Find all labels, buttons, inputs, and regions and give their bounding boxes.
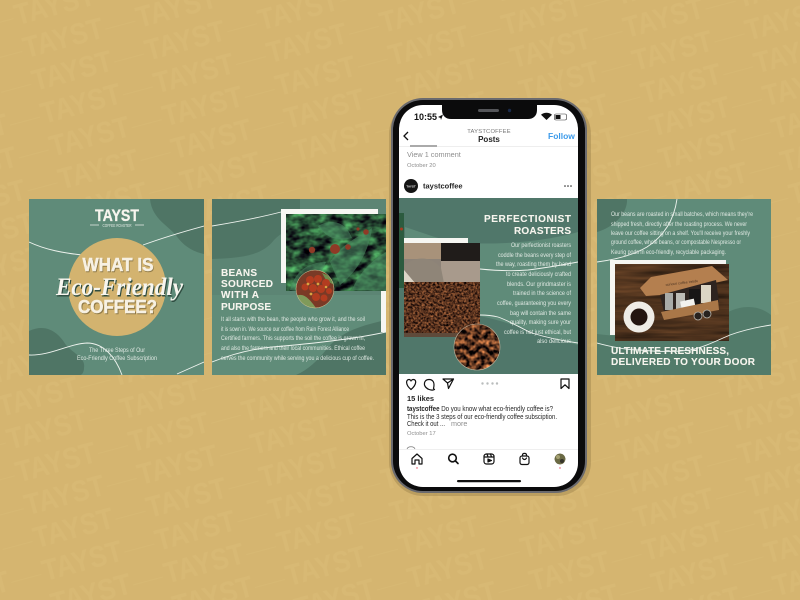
caption: more [451,419,467,428]
phone body [391,98,587,493]
action icons [407,379,569,390]
caption: 15 likes [407,394,434,403]
panel: what is eco-friendly coffee [29,199,204,375]
body text: the way, roasting them by hand [496,261,571,268]
speaker and camera [478,109,511,112]
status bar [414,112,566,122]
icon: reels [484,454,494,464]
caption: This is the 3 steps of our eco-friendly coffee subsciption. [407,412,557,421]
body text: trained in the science of [513,290,571,297]
heading: PURPOSE [221,302,271,313]
status bar: 10:55 [414,112,437,122]
scoop [418,258,444,282]
phone shadow [389,100,591,496]
box interior [660,280,719,312]
top-left dark blob [597,199,627,232]
app header: TAYSTCOFFEE [467,129,511,135]
heading: COFFEE? [79,298,158,318]
heading: SOURCED [221,279,273,290]
post header: taystcoffee [423,182,463,190]
top dark wave [212,199,300,259]
post header [404,179,572,193]
plant sliver [399,213,404,288]
body text: It all starts with the bean, the people who grow it, and the soil [221,316,365,323]
app header: Posts [478,135,500,144]
top-right dark blob [150,199,204,254]
home indicator [457,480,521,482]
heading: Eco-Friendly [55,274,184,301]
body text [496,242,572,345]
bottom curve [597,325,771,352]
photo: coffee box on wood: curious coffee inside [665,279,698,287]
body text [611,211,753,256]
subtitle [77,347,157,362]
subtitle: Eco-Friendly Coffee Subscription [77,355,157,362]
heading [612,347,755,365]
white curves [597,199,677,262]
icon: profile avatar [554,454,566,464]
previous post remnants: October 20 [407,163,436,169]
photo: roasting scoop and beans [404,243,480,337]
lighter wave [405,227,578,345]
heading: WHAT IS [83,256,154,276]
caption: October 17 [407,431,436,437]
body text: leave our coffee sitting on a shelf. You'll receive your freshly [611,230,751,237]
heading: BEANS [221,268,257,279]
heading: DELIVERED TO YOUR DOOR [611,357,756,368]
body text: also delicious [537,338,571,345]
bottom navigation [399,449,578,469]
white bar [404,238,468,243]
heading: WITH A [221,290,259,301]
body text: to create deliciously crafted [506,271,571,278]
body text: and also the farmers and their local communities. Ethical coffee [221,345,365,352]
white curves [29,226,204,375]
heading: COFFEE? [78,297,157,317]
white photo frame [281,209,386,332]
notch [442,104,537,119]
body text: coffee, guaranteeing you every [497,300,572,307]
body text: Our perfectionist roasters [511,242,571,249]
tan circle [68,238,166,336]
photo: berries circle [296,270,334,308]
notification dots [416,467,561,469]
photo: coffee box on wood [615,264,729,341]
subtitle: The Three Steps of Our [89,347,145,354]
panel: beans sourced with a purpose [212,199,386,375]
body text: blends. Our grindmaster is [507,281,571,288]
body text: bag will contain the same [510,310,571,317]
bottom-left dark blob [29,328,84,375]
lower dark wave [597,307,771,375]
heading [56,258,184,314]
body text: serves the community while serving you a delicious cup of coffee. [221,355,374,362]
screen [399,105,578,487]
coffee cup [624,302,654,332]
box lid [640,266,728,296]
infographic scene [29,98,771,496]
white photo frame [610,260,726,335]
white curves [480,262,578,343]
heading: PERFECTIONIST [484,214,571,225]
post: perfectionist roasters [399,198,578,374]
white curves [212,212,386,362]
icon: home [412,454,422,464]
body text: coddle the beans every step of [498,252,571,259]
photo: coffee plant [286,214,386,291]
body text: coffee is not just ethical, but [504,329,571,336]
TAYST logo: COFFEE ROASTER [102,223,132,228]
app header [399,129,578,147]
previous post remnants: View 1 comment [407,150,461,159]
body text: it is sown in. We source our coffee from Rain Forest Alliance [221,326,349,333]
box front [661,300,719,320]
panel: ultimate freshness [597,199,771,375]
app header: Follow [548,131,575,141]
heading [221,268,273,313]
heading [484,214,571,237]
icon: shop [520,453,529,464]
photo: roasted beans circle [454,324,500,370]
body text: Keurig pods in eco-friendly, recyclable packaging. [611,249,726,256]
lower band [212,295,386,375]
body text: quality, making sure your [510,319,571,326]
heading: Eco-Friendly [56,276,185,302]
previous post remnants [407,145,461,169]
heading: ULTIMATE FRESHNESS, [611,346,729,357]
caption [407,394,557,449]
caption: taystcoffee Do you know what eco-friendly coffee is? [407,404,553,413]
post header: TAYST [406,184,416,188]
body text: ground coffee, whole beans, or compostable Nespresso or [611,239,741,246]
heading: ROASTERS [514,226,571,237]
body text [221,316,374,362]
TAYST logo: TAYST [95,207,139,225]
heading: WHAT IS [82,255,154,275]
body text: Certified farmers. This supports the soil the coffee is grown in, [221,335,365,342]
body text: shipped fresh, directly after the roasting process. We never [611,221,747,228]
caption: Check it out ... [407,419,445,428]
icon: search [449,454,458,464]
coffee pods [694,312,702,320]
bottom-right dark blob [296,320,386,375]
bean pile [404,282,480,337]
phone mockup [389,98,591,496]
body text: Our beans are roasted in small batches, which means they're [611,211,753,218]
